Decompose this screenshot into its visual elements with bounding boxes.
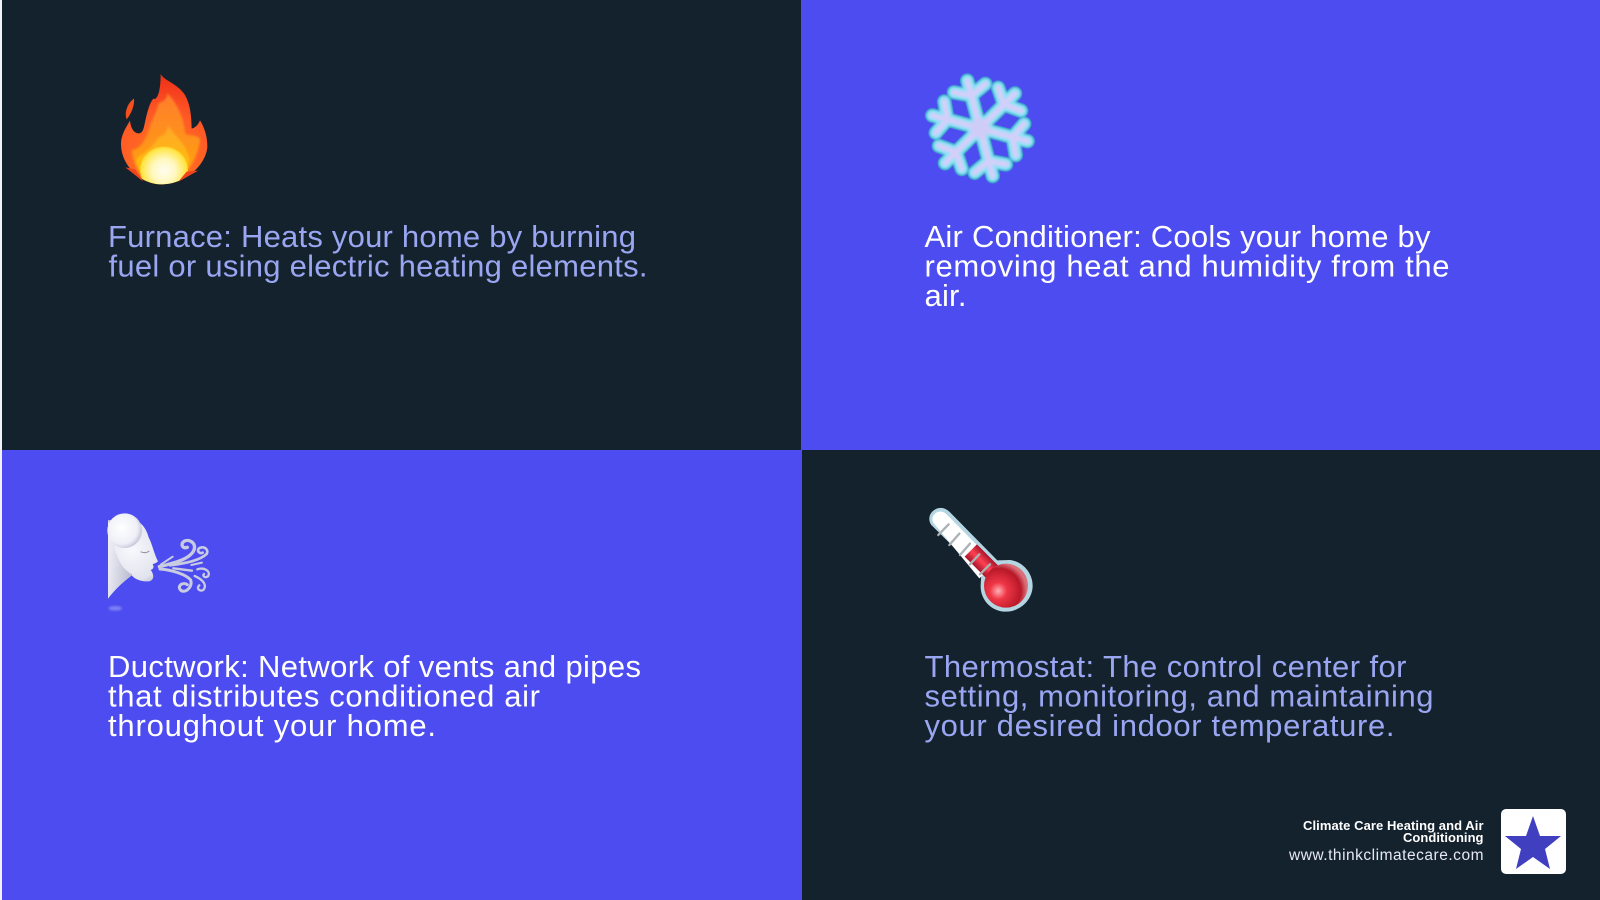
- text: ductwork description: [108, 649, 641, 743]
- text: air conditioner description: [924, 219, 1450, 313]
- text: thermostat description: setting, monitoring, and maintaining: [924, 678, 1434, 714]
- text: thermostat description: [924, 649, 1434, 743]
- text: thermostat description: Thermostat: The control center for: [924, 649, 1406, 684]
- panel: furnace: [108, 74, 645, 283]
- text: ductwork description: that distributes conditioned air: [108, 678, 540, 714]
- text: thermostat description: your desired indoor temperature.: [924, 708, 1394, 743]
- company name: [1303, 818, 1484, 845]
- icon: snowflake: [926, 81, 1034, 176]
- logo block: Climate Care: [1288, 809, 1566, 874]
- website url: www.thinkclimatecare.com: [1288, 847, 1484, 864]
- company name: Conditioning: [1403, 830, 1484, 845]
- panel: thermostat: [802, 450, 1600, 900]
- panel: air conditioner: [801, 0, 1600, 450]
- panel: ductwork: [0, 450, 802, 900]
- icon: wind face: [107, 513, 209, 611]
- text: furnace description: fuel or using electric heating elements.: [108, 248, 648, 284]
- text: air conditioner description: air.: [924, 278, 966, 313]
- company name: Climate Care Heating and Air: [1303, 818, 1484, 833]
- text: furnace description: Furnace: Heats your home by burning: [108, 219, 636, 254]
- text: furnace description: [108, 219, 648, 284]
- icon: flame: [121, 74, 207, 193]
- text: ductwork description: Ductwork: Network of vents and pipes: [108, 649, 641, 684]
- text: air conditioner description: Air Conditioner: Cools your home by: [924, 219, 1431, 254]
- text: ductwork description: throughout your home.: [108, 708, 436, 743]
- icon: thermometer: [929, 508, 1033, 612]
- text: air conditioner description: removing heat and humidity from the: [924, 248, 1450, 284]
- logo: star badge: [1501, 809, 1566, 874]
